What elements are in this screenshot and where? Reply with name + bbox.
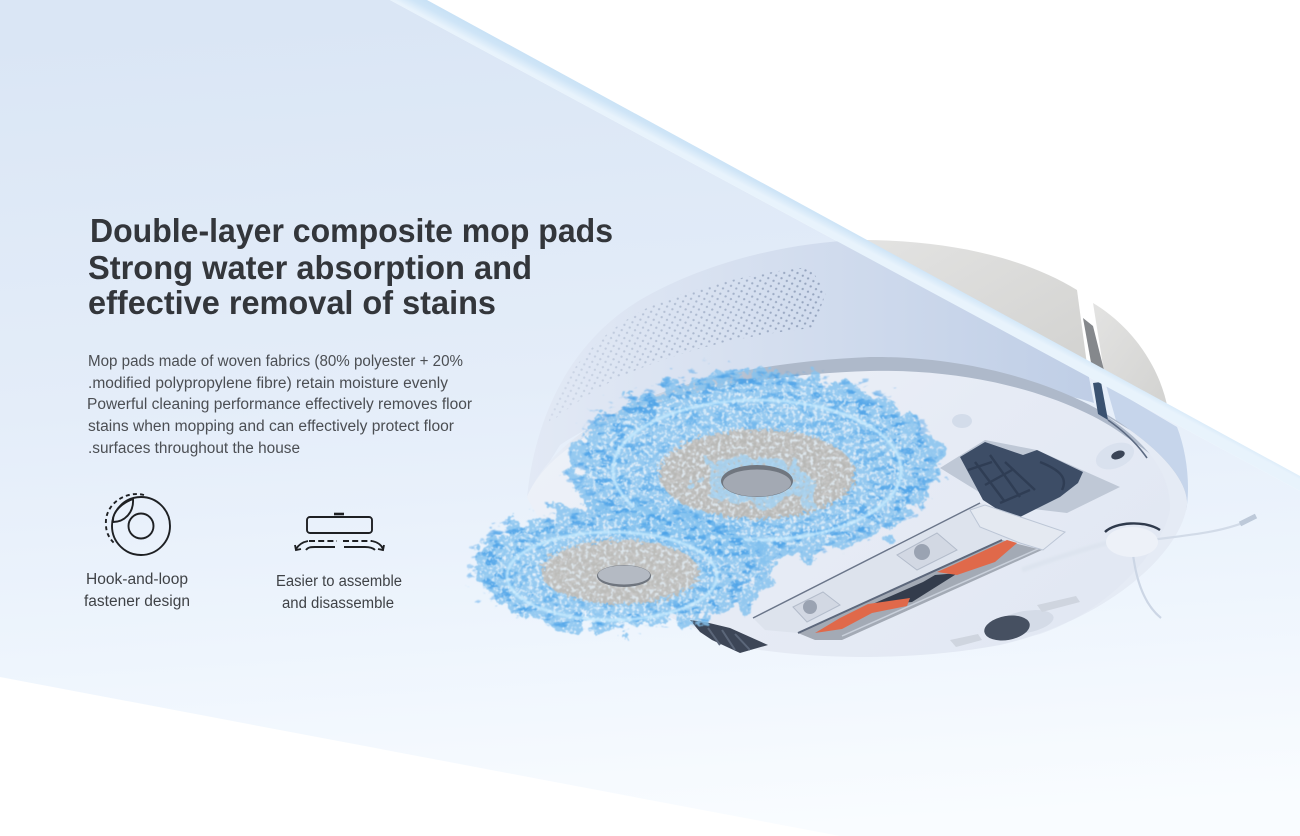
description text: .modified polypropylene fibre) retain moisture evenly — [88, 375, 448, 392]
hook-and-loop label: Hook-and-loop — [86, 571, 188, 588]
robot rear shell above plane — [860, 240, 1088, 372]
charging contacts — [950, 596, 1080, 647]
roller brush orange left — [815, 598, 910, 633]
outer bumper ring — [1000, 408, 1187, 645]
robot shell through plane — [527, 240, 1094, 498]
sensor dome — [952, 414, 972, 428]
icon: hook-and-loop pad — [106, 494, 170, 555]
water splash: small mop pad — [468, 507, 772, 629]
left main wheel — [690, 620, 768, 653]
brush dark interior — [868, 573, 958, 606]
hook-and-loop label — [84, 571, 190, 610]
assemble label — [276, 573, 402, 612]
title: Strong water absorption and — [88, 249, 532, 286]
glow ring large — [613, 400, 901, 540]
side brush — [1022, 516, 1256, 618]
brush guard line — [798, 540, 1002, 633]
splash streaks small — [468, 508, 768, 628]
robot vacuum — [527, 240, 1256, 657]
splash streaks large — [569, 370, 941, 554]
water around large hub — [699, 456, 815, 506]
title: effective removal of stains — [88, 284, 496, 321]
description text: stains when mopping and can effectively protect floor — [88, 418, 454, 435]
assemble label: and disassemble — [282, 595, 394, 612]
bumper divider dark — [1093, 382, 1108, 420]
brush latch — [970, 505, 1065, 550]
brush guard clips — [793, 533, 957, 622]
disc grey lip — [527, 357, 1187, 510]
splash base large — [573, 373, 941, 559]
icon: assemble and disassemble — [295, 514, 384, 550]
bumper gap above plane — [1083, 318, 1105, 374]
hook-and-loop label: fastener design — [84, 593, 190, 610]
caster wheel — [982, 606, 1055, 644]
white spray over large splash — [587, 384, 927, 552]
description text: Powerful cleaning performance effectively removes floor — [87, 396, 472, 413]
pad hub large — [721, 465, 793, 497]
water splash: large mop pad — [569, 370, 941, 559]
large mop pad — [659, 429, 855, 519]
brush housing — [753, 503, 1065, 633]
brush bay rail — [842, 548, 1040, 636]
speaker grille dots — [549, 268, 826, 421]
description text: Mop pads made of woven fabrics (80% polyester + 20% — [88, 353, 463, 370]
robot underside disc — [527, 371, 1187, 657]
brush bay — [798, 540, 1042, 640]
glow ring small — [507, 532, 717, 620]
assemble label: Easier to assemble — [276, 573, 402, 590]
plane edge highlight — [390, 0, 1300, 491]
cliff sensor — [1092, 437, 1138, 475]
bumper slot — [1108, 420, 1147, 458]
title: Double-layer composite mop pads — [90, 212, 613, 249]
main wheel right — [960, 442, 1083, 517]
robot bumper above plane — [1093, 303, 1168, 410]
pad hub small — [597, 565, 651, 587]
splash base small — [472, 507, 772, 629]
small mop pad — [541, 540, 699, 604]
housing top edge — [753, 503, 980, 618]
main wheel bay — [940, 440, 1120, 513]
roller brush orange right — [937, 540, 1017, 575]
description text — [87, 353, 472, 457]
bumper through plane — [1106, 385, 1188, 505]
description text: .surfaces throughout the house — [88, 440, 300, 457]
title — [88, 212, 613, 321]
white spray over small splash — [480, 514, 760, 626]
